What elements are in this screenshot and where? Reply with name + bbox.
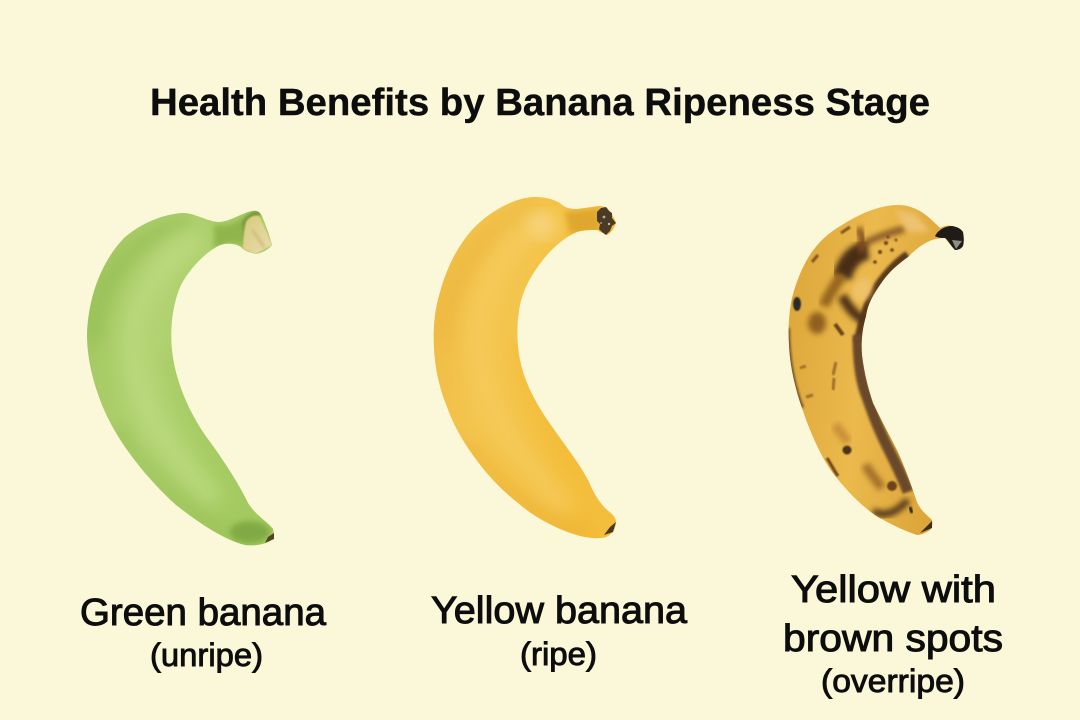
- panel: overripe banana: [780, 200, 1003, 699]
- panel: yellow banana: [425, 190, 688, 672]
- panel: green banana: [80, 205, 327, 673]
- label: yellow with: Yellow with: [791, 569, 996, 611]
- label: unripe: (unripe): [150, 637, 263, 673]
- label: yellow banana: Yellow banana: [431, 590, 688, 632]
- icon: green banana photo: [80, 205, 280, 550]
- icon: overripe banana photo: [788, 205, 964, 535]
- label: brown spots: brown spots: [783, 618, 1003, 660]
- icon: yellow banana photo: [434, 197, 616, 538]
- label: green banana: Green banana: [80, 592, 327, 634]
- label: ripe: (ripe): [520, 636, 597, 672]
- label: overripe: (overripe): [821, 663, 965, 699]
- title: Health Benefits by Banana Ripeness Stage: [150, 82, 930, 124]
